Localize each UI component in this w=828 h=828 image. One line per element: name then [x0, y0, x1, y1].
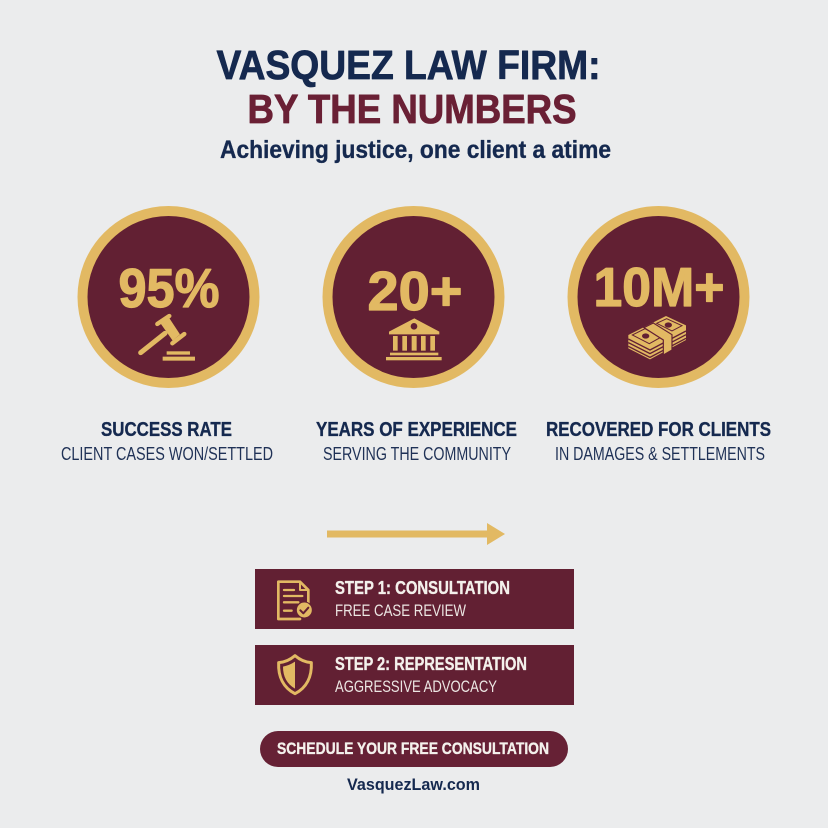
- step 1 panel: FREE CASE REVIEW: [335, 601, 466, 620]
- stat circle: success rate: [82, 211, 254, 383]
- icon: money stack: [628, 316, 686, 359]
- call to action button: SCHEDULE YOUR FREE CONSULTATION: [277, 739, 549, 758]
- label: recovered for clients: IN DAMAGES & SETTLEMENTS: [555, 444, 765, 464]
- stat circle: recovered: [572, 211, 744, 383]
- step 2 panel: [255, 645, 574, 705]
- label: years of experience: YEARS OF EXPERIENCE: [316, 419, 517, 441]
- title: VASQUEZ LAW FIRM:: [216, 42, 600, 88]
- stat circle: years of experience: [328, 211, 500, 383]
- icon: shield: [279, 656, 311, 694]
- stat circle: years of experience: 20+: [368, 260, 462, 322]
- icon: document with check: [278, 582, 312, 619]
- stat circle: recovered: 10M+: [594, 256, 724, 318]
- icon: gavel: [141, 316, 195, 361]
- icon: courthouse: [386, 318, 442, 360]
- step 1 panel: STEP 1: CONSULTATION: [335, 578, 510, 598]
- step 1 panel: [255, 569, 574, 629]
- label: success rate: [61, 419, 273, 464]
- label: years of experience: [316, 419, 517, 464]
- arrow: [327, 523, 505, 545]
- label: recovered for clients: [546, 419, 771, 464]
- label: success rate: CLIENT CASES WON/SETTLED: [61, 444, 273, 464]
- label: success rate: SUCCESS RATE: [101, 419, 232, 441]
- step 2 panel: STEP 2: REPRESENTATION: [335, 654, 527, 674]
- website: VasquezLaw.com: [347, 775, 480, 794]
- label: recovered for clients: RECOVERED FOR CLIENTS: [546, 419, 771, 441]
- title: [216, 42, 600, 132]
- title: BY THE NUMBERS: [248, 86, 576, 132]
- label: years of experience: SERVING THE COMMUNITY: [323, 444, 511, 464]
- call to action button: [260, 731, 568, 767]
- subtitle: Achieving justice, one client a atime: [220, 136, 611, 164]
- stat circle: success rate: 95%: [118, 257, 220, 319]
- step 2 panel: AGGRESSIVE ADVOCACY: [335, 677, 497, 696]
